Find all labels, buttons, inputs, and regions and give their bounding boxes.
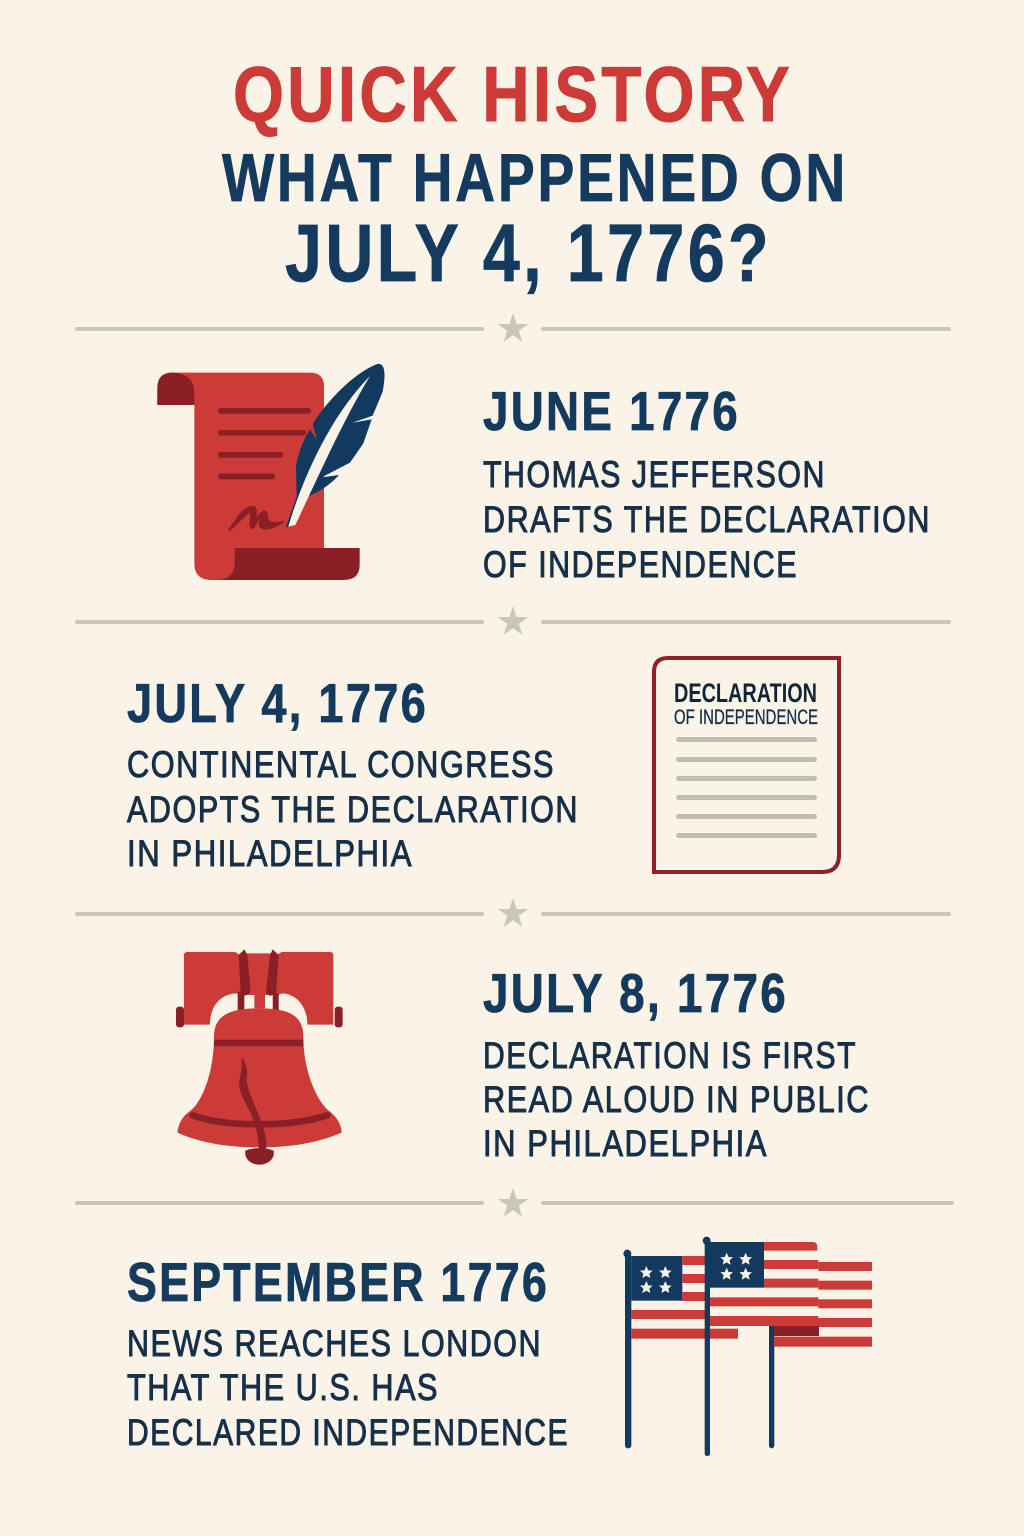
text: jefferson drafts: THOMAS JEFFERSON — [483, 454, 826, 495]
text: first read aloud — [483, 1035, 870, 1164]
divider 3 — [75, 898, 951, 927]
panel: september 1776 — [127, 1237, 872, 1456]
text: jefferson drafts — [483, 454, 931, 585]
heading: quick history: QUICK HISTORY — [233, 50, 793, 138]
date: june 1776: JUNE 1776 — [483, 380, 740, 442]
panel: july 8, 1776 — [176, 949, 870, 1165]
flag: right — [769, 1262, 872, 1448]
text: jefferson drafts: DRAFTS THE DECLARATION — [483, 499, 931, 540]
flag: centre — [703, 1237, 818, 1456]
text: congress adopts: ADOPTS THE DECLARATION — [127, 789, 579, 830]
text: congress adopts: CONTINENTAL CONGRESS — [127, 744, 555, 785]
date: july 8, 1776: JULY 8, 1776 — [483, 962, 788, 1024]
heading: what happened on: WHAT HAPPENED ON — [222, 140, 848, 216]
flag: left — [623, 1250, 738, 1448]
title — [222, 50, 848, 299]
text: congress adopts: IN PHILADELPHIA — [127, 833, 413, 874]
divider 1 — [75, 313, 951, 342]
text: news reaches london — [127, 1323, 569, 1453]
divider 4 — [75, 1188, 954, 1217]
text: news reaches london: DECLARED INDEPENDENCE — [127, 1412, 569, 1453]
text: jefferson drafts: OF INDEPENDENCE — [483, 544, 798, 585]
icon: scroll and quill — [157, 364, 384, 580]
icon: three flags — [623, 1237, 872, 1456]
icon: declaration document — [654, 658, 839, 872]
icon: declaration document: DECLARATION — [674, 678, 817, 708]
text: news reaches london: NEWS REACHES LONDON — [127, 1323, 542, 1364]
panel: july 4, 1776 — [127, 658, 839, 874]
text: first read aloud: READ ALOUD IN PUBLIC — [483, 1079, 870, 1120]
icon: declaration document: OF INDEPENDENCE — [674, 706, 818, 729]
icon: liberty bell — [176, 949, 343, 1165]
divider 2 — [75, 606, 951, 635]
date: september 1776: SEPTEMBER 1776 — [127, 1251, 549, 1313]
panel: june 1776 — [157, 364, 931, 585]
heading: july 4, 1776?: JULY 4, 1776? — [285, 208, 772, 299]
text: news reaches london: THAT THE U.S. HAS — [127, 1367, 439, 1408]
text: first read aloud: DECLARATION IS FIRST — [483, 1035, 857, 1076]
text: congress adopts — [127, 744, 579, 874]
date: july 4, 1776: JULY 4, 1776 — [127, 672, 428, 734]
text: first read aloud: IN PHILADELPHIA — [483, 1123, 768, 1164]
